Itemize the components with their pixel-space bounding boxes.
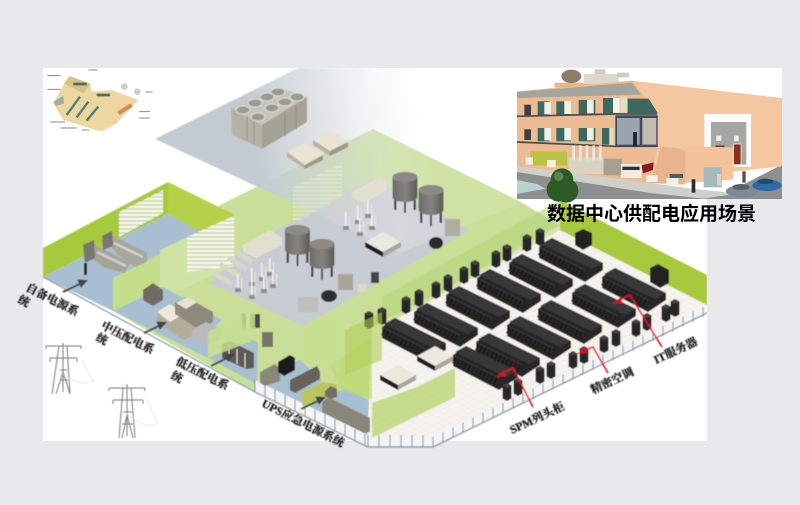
icon: low voltage cabinets — [222, 314, 273, 369]
raised floor fence — [255, 305, 707, 447]
arrow: UPS — [301, 397, 325, 409]
data center isometric floor plan — [16, 68, 707, 451]
panel: backup power room — [43, 182, 235, 311]
floor slabs — [517, 114, 657, 146]
panel: server room tile floor — [367, 230, 707, 447]
entrance frame and doors — [704, 114, 751, 167]
ground floor machines — [526, 145, 654, 178]
panel: medium voltage room floor — [113, 287, 222, 358]
ceiling — [517, 83, 641, 98]
server room translucent left wall — [382, 200, 560, 327]
white illustration panel — [43, 68, 707, 441]
label: UPS emergency power: UPS应急电源系统 — [260, 396, 348, 451]
icon: medium voltage cabinets — [143, 283, 221, 345]
left wall — [43, 182, 168, 277]
upper floor cabinets — [524, 97, 658, 115]
arrow: backup power — [63, 280, 87, 292]
building interior — [517, 81, 658, 183]
label: backup power system: 自备电源系 — [24, 280, 82, 319]
annex building — [646, 146, 733, 187]
partition wall with slats — [160, 215, 235, 300]
slatted wall on roof plate — [293, 163, 342, 224]
label: precision air conditioning: 精密空调 — [588, 364, 636, 397]
tree — [547, 168, 578, 203]
label: medium voltage distribution: 统 — [94, 330, 112, 349]
arrow: red pointer IT server — [612, 295, 662, 347]
floor — [43, 214, 215, 311]
label: medium voltage distribution: 中压配电系 — [99, 318, 157, 357]
light green building walls — [113, 129, 560, 440]
duct boxes — [365, 232, 453, 390]
icon: rooftop cooling tower — [231, 87, 307, 149]
photo: data center building cutaway — [517, 68, 782, 203]
icon: power tower right — [109, 384, 158, 438]
right wall — [168, 182, 235, 252]
icon: UPS cabinets — [260, 355, 370, 433]
label: low voltage distribution: 低压配电系 — [174, 354, 232, 393]
server racks group — [382, 238, 666, 390]
translucent green partition walls — [208, 308, 455, 438]
pavement — [517, 166, 730, 199]
cream horizontal tanks — [243, 177, 387, 258]
slatted wall — [119, 190, 163, 237]
label: low voltage distribution: 统 — [169, 368, 187, 387]
title: 数据中心供配电应用场景 — [547, 202, 756, 225]
panel: equipment hall grey floor — [210, 178, 470, 326]
rooftop grey plate — [155, 68, 517, 253]
glass control room — [615, 115, 658, 147]
people — [692, 171, 746, 193]
label: SPM column head cabinet: SPM列头柜 — [507, 399, 567, 437]
lower floor cabinets — [524, 128, 613, 145]
thumbnail: data center overview — [47, 70, 153, 132]
panel: UPS room floors — [255, 360, 372, 438]
server room back wall — [560, 200, 707, 305]
arrow: red pointer SPM — [496, 368, 533, 407]
hall machines — [298, 219, 460, 312]
label: backup power system: 统 — [16, 292, 34, 311]
icon: power tower left — [46, 343, 94, 394]
precision air conditioning cabinets — [364, 228, 680, 401]
road — [517, 165, 782, 199]
icon: diesel generators — [83, 231, 147, 275]
icon: rooftop condenser units — [287, 130, 348, 169]
large black cabinets — [575, 229, 669, 288]
cars — [726, 179, 782, 197]
panel: low voltage room floor — [208, 338, 258, 384]
tanks — [285, 172, 444, 280]
chillers — [212, 197, 358, 284]
label: IT servers: IT服务器 — [651, 334, 700, 367]
pump clusters — [235, 200, 376, 299]
building foot edge — [43, 277, 255, 392]
front wall of medium voltage room — [113, 254, 160, 311]
arrow: low voltage — [211, 354, 234, 366]
roof equipment — [554, 69, 633, 87]
arrow: red pointer air conditioning — [577, 347, 608, 373]
arrow: medium voltage — [144, 322, 166, 333]
building side wall — [632, 81, 782, 181]
